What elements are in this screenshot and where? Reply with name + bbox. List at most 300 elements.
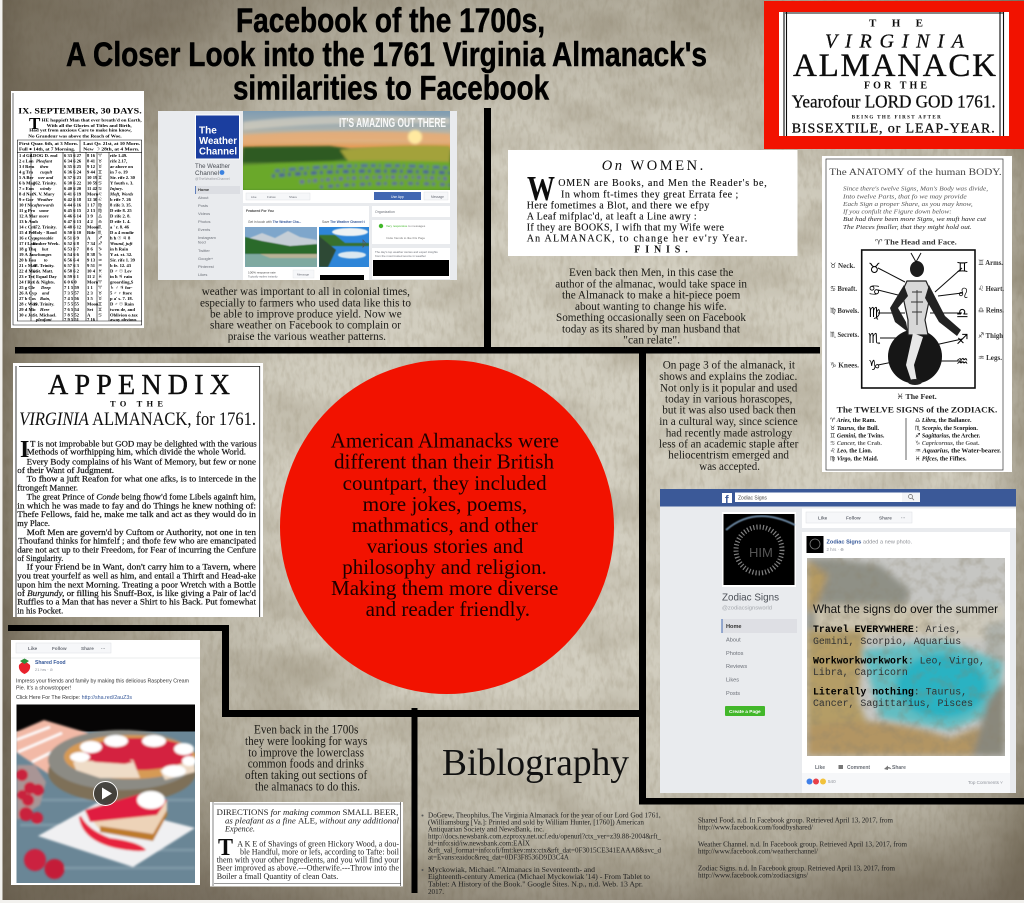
zodiac symbols	[868, 260, 970, 374]
almanack day table: 6 45 6 15	[64, 208, 82, 213]
almanack day table: 7 3 5 57	[64, 290, 80, 296]
zodiac symbols: ♍	[868, 305, 881, 321]
almanack day table: 6 56 6 4	[64, 258, 80, 262]
almanack day table: 7 16	[87, 317, 96, 322]
almanack day table: D ♂ ☉ Rain	[110, 302, 134, 306]
almanack day table: 8 38	[87, 252, 96, 257]
post image: coast with text overlay: Gemini, Scorpio, Aquarius	[813, 636, 961, 647]
page name and navigation: Posts	[198, 203, 208, 208]
featured for you: Get in touch with The Weather Cha...	[248, 220, 301, 224]
almanack day table: 1 d Gil.	[19, 153, 33, 158]
bibliography list: left column: Myckowiak, Michael. "Almanacs in Seventeenth- and	[428, 865, 595, 874]
panel: Appendix page: TO THE	[110, 399, 163, 409]
almanack day table: a ' r. 8. 46	[110, 224, 130, 230]
panel: On Women poem: On WOMEN.	[602, 158, 703, 174]
appendix body text: of their Want of Judgment.	[17, 465, 114, 475]
almanack day table: ♈	[98, 153, 102, 158]
almanack day table: afterwards	[34, 202, 54, 208]
panel: September almanack page: Had yet from anxious Care to make him know,	[29, 128, 132, 132]
panel: Appendix page: APPENDIX	[48, 370, 230, 401]
page name and navigation: Create a Page	[729, 709, 761, 715]
almanack day table: 27 b Cos	[19, 296, 36, 301]
panel: Weather Channel Facebook screenshot	[158, 111, 457, 280]
panel: Anatomy of the human body: If you confult the Figure down below:	[842, 208, 952, 215]
bibliography list: right column: http://www.facebook.com/foodbyshared/	[698, 822, 814, 832]
page name and navigation: About	[198, 195, 209, 200]
featured for you: Message	[297, 272, 310, 276]
almanack day table: 6 36 6 24	[64, 170, 82, 174]
almanack day table: ♑	[98, 246, 102, 252]
caption: food: Even back in the 1700s	[254, 722, 358, 736]
panel: Appendix page: I	[20, 437, 29, 463]
almanack day table: 6 37 6 23	[64, 175, 82, 180]
almanack day table: 25 g Cle	[19, 285, 35, 290]
post image: coast with text overlay: What the signs do over the summer	[813, 602, 998, 616]
zodiac symbols: ♐	[956, 332, 969, 348]
panel: September almanack page: HE happieft Man that ever breath'd on Earth,	[42, 118, 142, 123]
appendix body text: Every Body complains of his Want of Memory, but few or none	[27, 456, 256, 466]
caption: food: common foods and drinks	[248, 757, 364, 771]
almanack day table: 11 g Pro	[19, 208, 36, 213]
almanack day table: 10 4	[87, 268, 96, 274]
zodiac symbols: ♒	[956, 354, 969, 370]
caption: food: to improve the lowerclass	[248, 745, 364, 759]
page name and navigation: Pinterest	[198, 264, 215, 269]
appendix body text: The great Prince of Conde being fhow'd fome Libels againft him,	[27, 492, 256, 502]
almanack day table: 4 g Tra	[19, 170, 34, 174]
caption: food: often taking out sections of	[245, 768, 368, 782]
appendix body text: T is not improbable but GOD may be delighted with the various	[30, 439, 257, 449]
almanack day table: 22 d Mau	[19, 268, 38, 274]
organization sidebar: Invite friends to like this Page	[386, 236, 425, 240]
page name and navigation: Posts	[726, 691, 740, 697]
almanack day table: ♍	[98, 202, 102, 208]
almanack day table: D ♂ ☉ Lev	[110, 268, 132, 274]
almanack day table: Injury.	[109, 186, 123, 191]
almanack day table: rife 2.17,	[110, 158, 127, 164]
appendix body text	[17, 439, 257, 616]
caption: weather: be able to improve produce yield. Now we	[210, 306, 402, 320]
body labels: ♊ Arms.	[978, 258, 1003, 267]
almanack day table: changes	[36, 252, 52, 257]
almanack day table: 13 b Amb	[19, 219, 38, 224]
almanack day table: 172. Trinity.	[33, 224, 57, 230]
almanack day table: and	[42, 290, 50, 296]
zodiac man figure	[878, 253, 962, 385]
action buttons: Follow	[52, 646, 67, 651]
almanack day table: wer and	[38, 175, 54, 180]
almanack day table: ♎	[98, 219, 102, 224]
appendix body text: If your Friend be in Want, don't carry him to a Tavern, where	[27, 562, 256, 572]
action bar: Use App	[391, 195, 404, 199]
almanack day table: 18. Trinity.	[33, 263, 54, 268]
caption: zodiac: Not only is it popular and used	[660, 380, 797, 394]
almanack day table: 2 3	[87, 290, 93, 296]
almanack day table: 11 42	[87, 186, 98, 191]
almanack day table: ♓	[98, 268, 102, 274]
almanack day table: 9 13	[87, 258, 96, 262]
almanack day table: 14 c Cru	[19, 224, 36, 230]
heading: Biblography: Biblography	[442, 742, 629, 784]
almanack day table: 7 6 5 54	[64, 307, 80, 312]
zodiac symbols: ♌	[957, 286, 970, 302]
almanack day table: then	[40, 164, 49, 169]
appendix body text: upon him the next Morning. Treating a poor Wretch with a Bottle	[17, 579, 256, 589]
almanack day table: 19 A Jan	[19, 252, 36, 257]
post actions	[802, 765, 1010, 793]
caption: women: "can relate".	[623, 333, 680, 347]
action buttons: Like	[28, 646, 38, 651]
post actions: Top Comments ˅	[968, 780, 1003, 785]
profile picture	[722, 512, 796, 587]
caption: zodiac: heliocentrism emerged and	[668, 448, 789, 462]
action bar	[243, 190, 450, 203]
almanack day table: 3 5	[87, 296, 93, 301]
almanack day table: ♑	[98, 252, 102, 257]
almanack day table: 16 e Cyp	[19, 236, 37, 240]
appendix body text: Methods of worfhipping him, which divide the whole World.	[27, 447, 246, 457]
bibliography list: right column: Weather Channel. n.d. In Facebook group. Retrieved April 13, 2017, from	[698, 840, 907, 848]
almanack day table: Sir. rife 2. 30	[110, 175, 136, 180]
almanack day table: ♊	[98, 175, 102, 180]
almanack day table: Moon	[87, 224, 99, 230]
almanack day table: D rife 8. 25	[110, 208, 132, 213]
body labels	[830, 258, 1004, 370]
almanack day table: 6 46 6 14	[64, 214, 82, 218]
action buttons	[802, 508, 1016, 528]
list of twelve signs: ♍ Virgo, the Maid.	[830, 456, 879, 463]
post actions: Comment	[847, 765, 870, 771]
post card: 2 hrs · ⊕	[826, 547, 844, 552]
appendix body text: of Singularity.	[17, 553, 63, 563]
bibliography list: left column: 2017.	[428, 887, 444, 896]
almanack day table: 30 e Jer	[19, 312, 34, 318]
page name and navigation: Google+	[198, 256, 214, 261]
panel: Shared Food Facebook post	[11, 640, 200, 885]
almanack day table: 21 c Mat	[19, 263, 37, 268]
almanack day table: ♊	[98, 302, 102, 306]
appendix body text: ftrongeft Manner.	[17, 482, 78, 492]
almanack day table: ♊	[98, 307, 102, 312]
title: A Closer Look into the 1761 Virginia Almanack's	[66, 36, 707, 74]
almanack day table: 23 e Tec	[19, 274, 35, 279]
almanack day table: { & Nights.	[33, 280, 55, 284]
panel: September almanack page	[11, 91, 144, 328]
almanack day table: ♐	[98, 241, 102, 246]
title: Facebook of the 1700s,	[236, 2, 545, 40]
action bar: Share	[289, 195, 297, 199]
almanack day table: ♒	[98, 263, 102, 268]
red circle callout: more jokes, poems,	[363, 492, 527, 516]
almanack day table: DOG D. end	[33, 153, 58, 158]
red circle callout: countpart, they included	[343, 471, 547, 495]
action bar: Message	[431, 195, 444, 199]
caption: zodiac: but it was also used back then	[662, 403, 796, 417]
almanack day table: D rife 1. 4.	[110, 219, 131, 224]
body labels: ♌ Heart.	[978, 284, 1004, 293]
almanack day table: 6 51 6 9	[64, 236, 80, 240]
almanack day table: 1 1	[87, 285, 93, 290]
almanack day table: 6 34 6 26	[64, 158, 82, 164]
almanack day table: ♉	[98, 290, 102, 296]
almanack day table: Morn	[87, 192, 99, 196]
almanack day table: Morn	[87, 280, 99, 284]
panel: On Women poem: Here fometimes a Blot, and there we efpy	[527, 200, 709, 211]
featured for you	[243, 206, 369, 280]
almanack day table: Sir. rife 1. 39	[110, 258, 136, 262]
caption: women: author of the almanac, would take space in	[555, 276, 747, 290]
zodiac symbols: ♏	[868, 331, 881, 347]
panel: September almanack page: IX. SEPTEMBER, 30 DAYS.	[18, 105, 142, 115]
almanack day table: agreeable	[35, 236, 53, 240]
almanack day table: 3 f Rem	[19, 164, 34, 169]
almanack day table: 7 9 5 51	[64, 317, 80, 322]
icon: strawberry logo	[19, 658, 30, 674]
panel: red title page of the almanack: THE	[869, 18, 923, 30]
almanack day table: 11 2	[87, 274, 95, 279]
almanack day table: 12 A Mar	[19, 214, 37, 218]
panel: Zodiac Signs Facebook screenshot	[660, 489, 1016, 793]
panel: Anatomy of the human body: But had there been more Signs, we muft have cut	[843, 216, 986, 223]
list of twelve signs: ♐ Sagittarius, the Archer.	[915, 432, 981, 439]
Facebook header bar	[660, 489, 1016, 506]
page name and navigation	[722, 592, 797, 716]
almanack day table: ♍	[98, 208, 102, 213]
list of twelve signs: ♏ Scorpio, the Scorpion.	[915, 425, 978, 432]
caption: zodiac	[659, 358, 798, 473]
appendix body text: in which he was made to fay and do Things he knew nothing of:	[17, 500, 256, 510]
red circle callout: different than their British	[334, 450, 554, 474]
post image: coast with text overlay: Cancer, Sagittarius, Pisces	[813, 698, 973, 709]
bibliography list: right column: http://www.facebook.com/weatherchannel/	[698, 846, 819, 856]
panel: red title page of the almanack	[764, 1, 1024, 149]
almanack day table: ♌	[98, 197, 102, 202]
post text: Click Here For The Recipe: http://sha.red/2auZ3s	[16, 695, 133, 701]
bibliography list: right column	[698, 816, 907, 880]
almanack day table: ♎	[98, 214, 102, 218]
almanack day table: 6 47 6 13	[64, 219, 82, 224]
almanack day table: 6 b Mag	[19, 180, 36, 186]
almanack day table: in ħ ♃ rain	[110, 274, 133, 279]
almanack day table: 162. Trinity.	[33, 180, 57, 186]
almanack day table: ♉	[98, 296, 102, 301]
almanack day table: ar above on	[110, 164, 133, 169]
almanack day table: { St. Matt.	[33, 268, 53, 274]
caption: zodiac: less of an academic staple after	[659, 437, 798, 451]
post text: Pie. It's a showstopper!	[16, 686, 71, 692]
panel: September almanack page: First Quar. 6th, at 3 Morn.	[19, 141, 78, 146]
list of twelve signs: ♓ Pifces, the Fifhes.	[915, 456, 967, 463]
post actions: Share	[892, 765, 906, 771]
page name and navigation: feed	[198, 240, 206, 244]
icon: Weather Channel logo	[195, 114, 240, 160]
post text: Impress your friends and family by making this delicious Raspberry Cream	[16, 678, 189, 684]
almanack day table: Rain,	[40, 296, 50, 301]
post text	[16, 660, 189, 701]
almanack day table: ♋	[98, 312, 102, 318]
page name and navigation: @zodiacsignsworld	[722, 606, 772, 612]
list of twelve signs: ♑ Capricornus, the Goat.	[915, 440, 980, 447]
body labels: ♒ Legs.	[978, 353, 1002, 362]
caption: women: Even back then Men, in this case the	[569, 265, 733, 279]
list of twelve signs: ♒ Aquarius, the Water-bearer.	[915, 449, 1002, 455]
post image: coast with text overlay: Libra, Capricorn	[813, 667, 908, 678]
almanack day table: { Equal Day	[33, 274, 57, 279]
almanack day table: 24 f Rev	[19, 280, 36, 284]
list of twelve signs: ♋ Cancer, the Crab.	[830, 441, 882, 447]
page name and navigation: About	[726, 638, 741, 644]
panel: red title page of the almanack: VIRGINIA	[825, 31, 965, 53]
title: similarities to Facebook	[233, 70, 549, 108]
red circle callout: Making them more diverse	[331, 576, 558, 600]
page name and navigation: Channel	[195, 170, 220, 177]
panel: On Women poem: An ALMANACK, to change her ev'ry Year.	[527, 234, 747, 245]
red circle callout: various stories and	[367, 534, 524, 558]
almanack day table: more	[39, 214, 49, 218]
almanack day table: 9 12	[87, 164, 96, 169]
almanack day table: ♈	[98, 285, 102, 290]
profile picture: HIM	[749, 545, 773, 560]
almanack day table: 18 g Thq	[19, 246, 37, 252]
almanack day table: 12 30	[87, 197, 98, 202]
almanack day table: 2 13	[87, 208, 96, 213]
red circle callout	[280, 360, 614, 694]
appendix body text: my Place.	[17, 518, 50, 528]
Facebook header bar: Zodiac Signs	[738, 496, 767, 502]
appendix body text: Ruffles to a Man that has never a Shirt to his Back. Put fomewhat	[17, 596, 257, 606]
panel: September almanack page: No Grandeur was above the Reach of Woe.	[28, 133, 122, 138]
caption: zodiac: today in various horascopes,	[665, 392, 792, 406]
bibliography list: left column: (Williamsburg [Va.]: Printed and sold by William Hunter, [1760]) American	[428, 818, 644, 826]
action buttons: Share	[81, 646, 94, 651]
almanack day table: ♌	[98, 192, 102, 196]
action buttons: Like	[818, 516, 828, 520]
red circle callout: and reader friendly.	[366, 597, 530, 621]
panel: small beer directions clipping: Boiler a fmall Quantity of clean Oats.	[217, 871, 338, 881]
almanack day table: 7 8 5 52	[64, 312, 80, 318]
panel: On Women poem	[508, 150, 798, 256]
almanack day table: 6 59 6 1	[64, 274, 80, 279]
almanack day table: 5 ♂ ♀ ftore	[110, 290, 132, 296]
almanack day table: A	[87, 312, 91, 318]
almanack day table: ♊	[98, 170, 102, 174]
zodiac symbols: ♉	[868, 261, 881, 277]
appendix body text: Thefe Fellows, faid he, make me talk and act as they would do in	[17, 509, 257, 519]
caption: women: today as its shared by man husband that	[562, 321, 741, 335]
caption: zodiac: was accepted.	[699, 459, 760, 473]
panel: small beer directions clipping: as pleafant as a fine ALE, without any additional	[225, 815, 400, 825]
almanack day table: 10 59	[87, 180, 98, 186]
almanack day table: ♓	[98, 274, 102, 279]
title	[66, 2, 707, 108]
almanack day table: D rife 2. 8.	[110, 214, 131, 218]
bibliography list: left column: Eighteenth-century America (Michael Myckowiak '14) - From Tablet to	[428, 872, 650, 881]
panel: red title page of the almanack: Yearofour LORD GOD 1761.	[792, 91, 996, 111]
appendix body text: dare not act up to their Freedom, for Fear of incurring the Cenfure	[17, 544, 256, 554]
body labels: ♐ Thigh	[978, 331, 1003, 340]
post actions: Like	[815, 765, 825, 771]
almanack day table: cuqult	[40, 170, 53, 174]
almanack day table: 2 e Lon	[19, 158, 34, 164]
almanack day table: windy	[40, 186, 52, 191]
almanack day table: 6 50 6 10	[64, 230, 82, 235]
almanack day table: 28 c Wen	[19, 302, 37, 306]
almanack day table: 8 41	[87, 158, 96, 164]
post image: coast with text overlay: Workworkworkwork: Leo, Virgo,	[813, 656, 985, 666]
panel: September almanack page: Full ● 14th, at 7 Morning.	[19, 146, 75, 151]
list of twelve signs: ♉ Taurus, the Bull.	[830, 425, 880, 432]
caption: food	[245, 722, 368, 793]
almanack day table: St. Michael.	[33, 312, 56, 318]
panel: Anatomy of the human body	[822, 156, 1012, 472]
appendix body text: you treat yourfelf as well as him, and entail a Thirft and Head-ake	[17, 571, 256, 581]
page name and navigation: Likes	[726, 678, 739, 684]
panel: On Women poem: FINIS.	[634, 245, 688, 256]
body labels: ♏ Secrets.	[830, 330, 859, 339]
almanack day table: Pleafant	[36, 158, 53, 164]
panel: On Women poem: In whom ft-times they great Errata fee ;	[561, 189, 739, 200]
almanack day table: Ember Week.	[33, 241, 60, 246]
almanack day table: 8 16	[87, 153, 96, 158]
almanack day table: Oblivion o.tax	[110, 312, 139, 318]
almanack day table	[19, 153, 139, 322]
almanack day table: A	[87, 236, 91, 240]
almanack day table: some	[38, 208, 49, 213]
almanack day table: Weather	[37, 197, 53, 202]
caption: weather: praise the various weather patterns.	[228, 329, 386, 343]
post image: coast with text overlay: Literally nothing: Taurus,	[813, 687, 967, 698]
panel: small beer directions clipping: T	[218, 835, 233, 861]
panel: Anatomy of the human body: ♈ The Head and Face.	[875, 237, 957, 246]
almanack day table: 26 A Cyp	[19, 290, 37, 296]
caption: zodiac: shows and explains the zodiac.	[659, 369, 797, 383]
almanack day table: 19. Trinity.	[33, 302, 54, 306]
almanack day table: ♏	[98, 224, 102, 230]
almanack day table: ♋	[98, 180, 102, 186]
almanack day table: 7 5 5 55	[64, 302, 80, 306]
almanack day table: ♏	[98, 230, 102, 235]
appendix body text: To fhow a juft Reafon for what one afks, is to intercede in the	[27, 474, 256, 484]
almanack day table: rife 1.49.	[110, 153, 127, 158]
panel: Appendix page: VIRGINIA ALMANACK, for 1761.	[19, 410, 256, 430]
panel: small beer directions clipping: them with your other Ingredients, and you will find your	[217, 854, 399, 864]
list of twelve signs: ♎ Libra, the Ballance.	[915, 418, 972, 424]
almanack day table: 6 54 6 6	[64, 252, 80, 257]
action bar: Follow	[267, 195, 277, 199]
bibliography list: right column: Zodiac Signs. n.d. In Facebook group. Retrieved April 13, 2017, from	[698, 864, 895, 872]
appendix body text: Thoufand thinks for himfelf ; and thofe few who are emancipated	[18, 536, 257, 546]
panel: On Women poem: OMEN are Books, and Men the Reader's be,	[558, 178, 767, 189]
caption: weather: weather was important to all in colonial times,	[202, 284, 410, 298]
cover photo: sunset over flower field	[243, 111, 450, 190]
post text: Shared Food	[35, 660, 66, 666]
body labels: ♍ Bowels.	[830, 306, 859, 315]
almanack day table: 6 48 6 12	[64, 224, 82, 230]
panel: Anatomy of the human body: ♓ The Feet.	[897, 392, 937, 401]
panel: Anatomy of the human body: The ANATOMY of the human BODY.	[829, 167, 1002, 178]
action buttons: Follow	[846, 516, 861, 520]
panel: Anatomy of the human body: Into twelve Parts, that fo we may provide	[842, 193, 967, 200]
body labels: ♉ Neck.	[830, 261, 855, 270]
page name and navigation: Instagram	[198, 235, 216, 240]
almanack day table: 5 A Ber	[19, 175, 34, 180]
almanack day table: 6 58 6 2	[64, 268, 80, 274]
almanack day table: 10 f Nic	[19, 202, 34, 208]
list of twelve signs: ♊ Gemini, the Twins.	[830, 432, 885, 439]
icon: Weather Channel logo: The	[199, 126, 217, 136]
panel: September almanack page: New ☽ 28th, at 4 Morn.	[83, 146, 139, 151]
list of twelve signs: ♈ Aries, the Ram.	[830, 417, 877, 424]
